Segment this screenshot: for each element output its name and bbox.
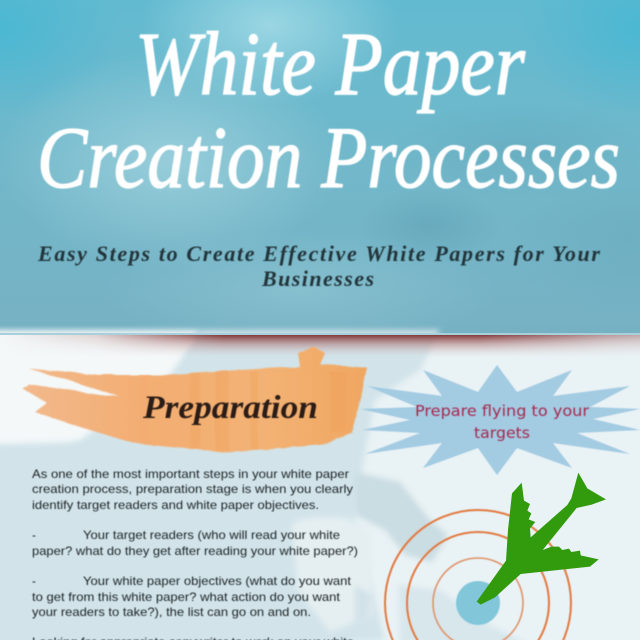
body text: creation process, preparation stage is when you clearly (32, 483, 353, 496)
body text: Your target readers (who will read your white (83, 529, 340, 542)
body text: paper? what do they get after reading your white paper?) (32, 545, 358, 558)
body text: - (32, 529, 36, 542)
callout text (415, 402, 590, 442)
body text: your readers to take?), the list can go on and on. (32, 606, 311, 619)
title: White Paper (135, 15, 526, 114)
body text: - (32, 575, 36, 588)
icon: green airplane (477, 473, 606, 605)
body text: identify target readers and white paper objectives. (32, 499, 319, 512)
body text: to get from this white paper? what action do you want (32, 591, 341, 604)
header panel (0, 0, 640, 350)
starburst callout (360, 365, 640, 475)
heading: Preparation: Preparation (142, 390, 318, 426)
lower watercolor background (0, 330, 640, 640)
subtitle: Businesses (261, 266, 374, 291)
body text (32, 468, 358, 640)
body text: As one of the most important steps in your white paper (32, 468, 349, 481)
target rings (385, 510, 571, 640)
subtitle (37, 241, 600, 291)
callout text: Prepare flying to your (415, 402, 590, 420)
body text: Your white paper objectives (what do you want (83, 575, 352, 588)
callout text: targets (474, 424, 530, 442)
title (37, 15, 620, 207)
subtitle: Easy Steps to Create Effective White Papers for Your (37, 241, 600, 266)
orange brush stroke banner (22, 346, 367, 452)
